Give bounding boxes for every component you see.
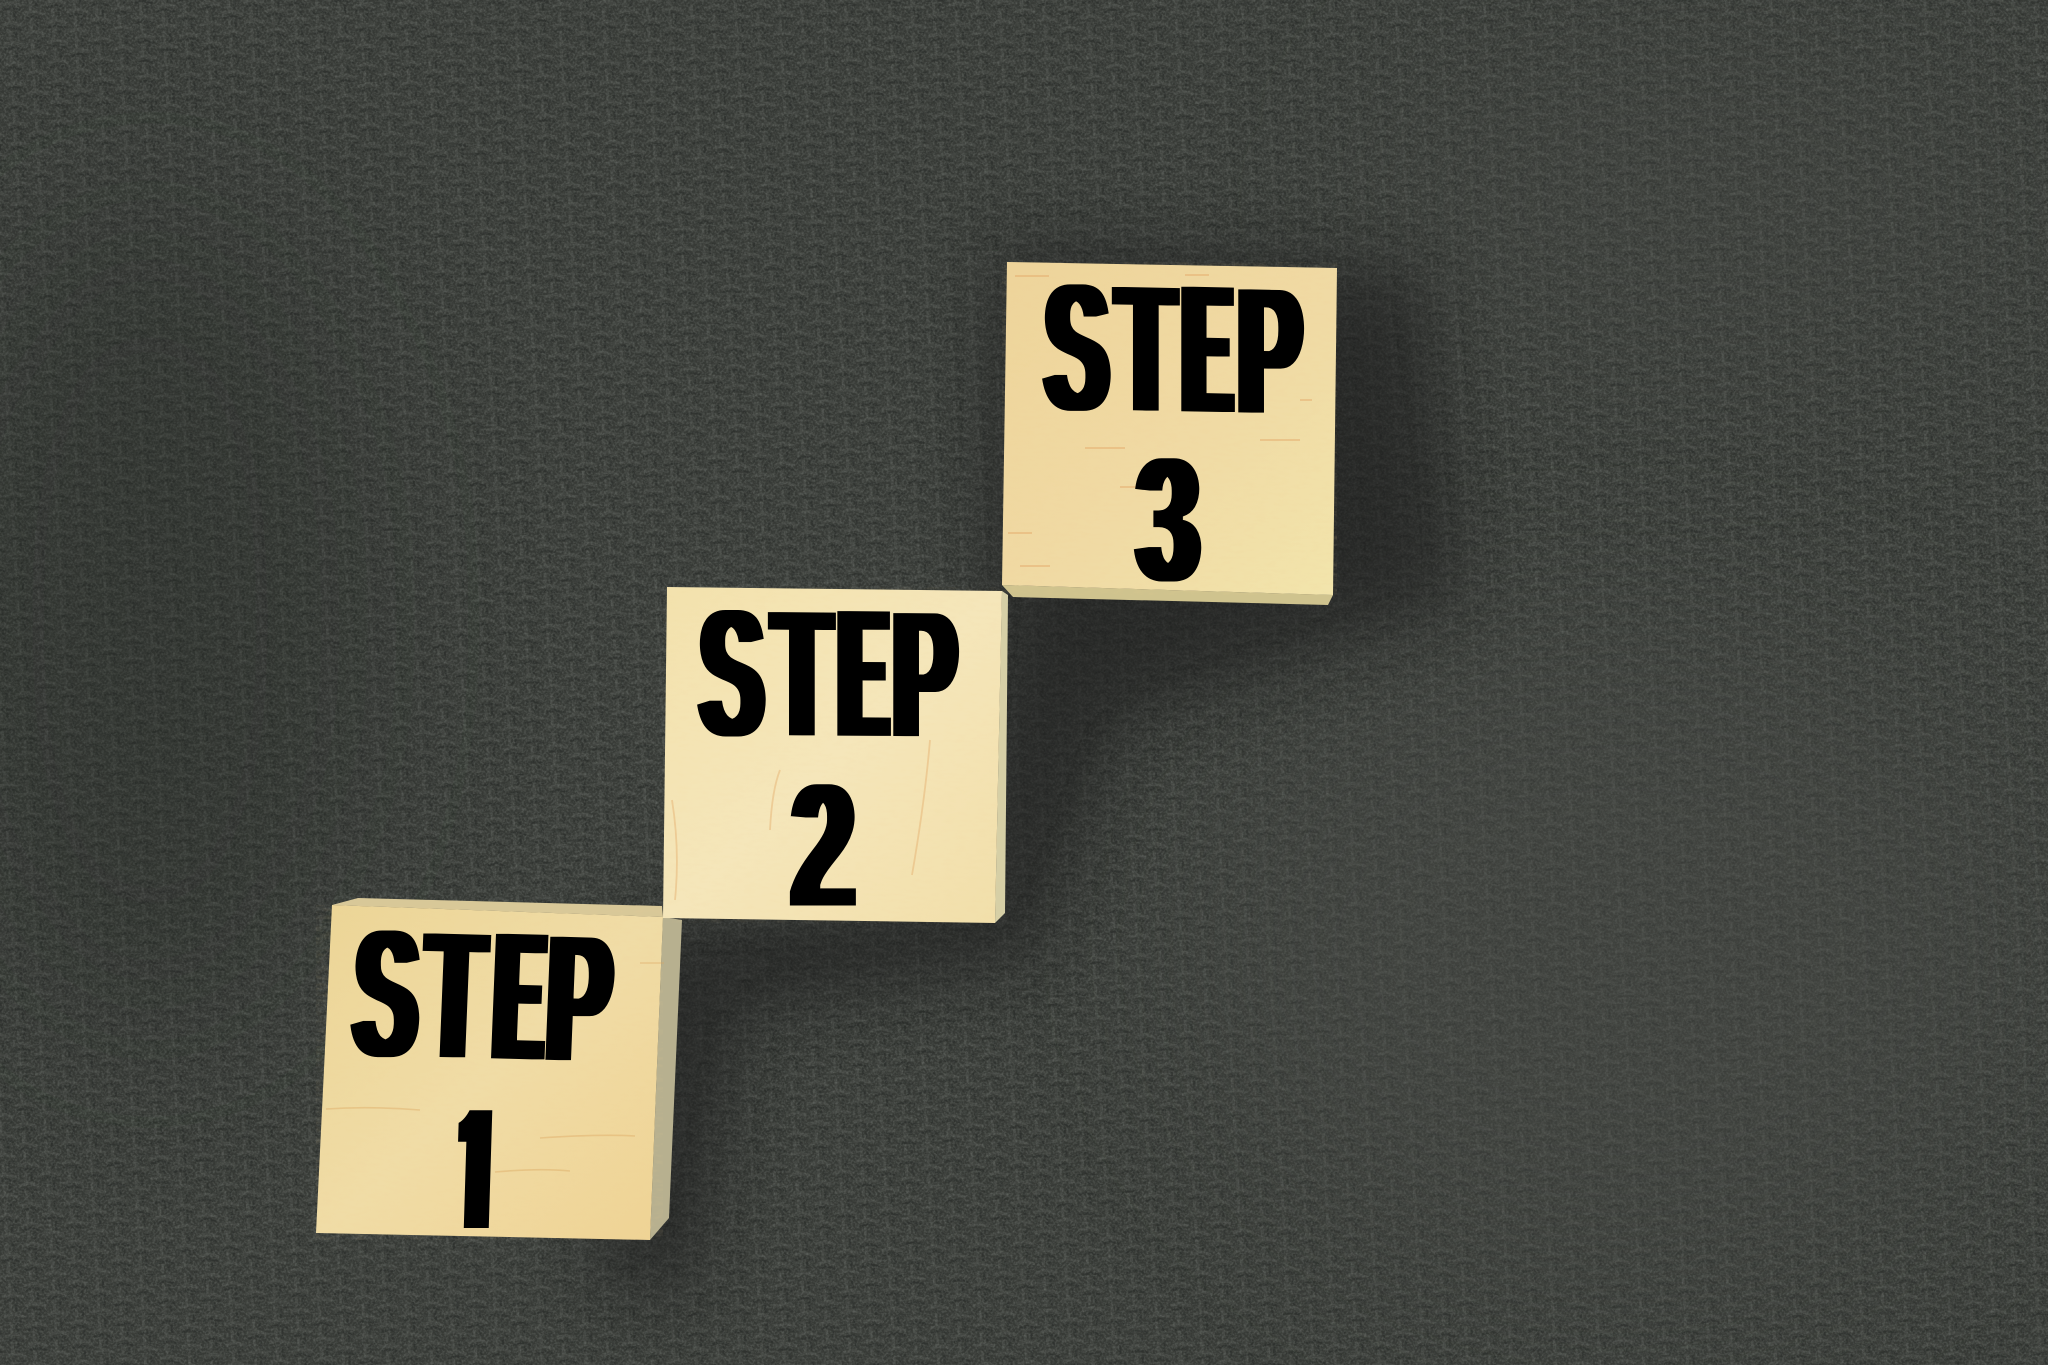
block: step 1 (316, 898, 682, 1240)
block 2 label: 2: 2 (792, 745, 854, 945)
cast shadows of the blocks (600, 250, 1460, 1290)
block 2 right side (995, 591, 1008, 923)
block 1 face (316, 905, 663, 1240)
block 1 wood grain (326, 963, 664, 1172)
block 3 face (1002, 262, 1337, 595)
block 2 face (663, 587, 1002, 923)
block: step 2 (663, 538, 1008, 945)
block 3 wood grain (1008, 275, 1312, 566)
block 1 right side (650, 917, 682, 1240)
block 1 label: STEP: STEP (350, 857, 616, 1113)
block: step 3 (1002, 212, 1337, 619)
block 1 label: 1: 1 (454, 1020, 499, 1318)
block 3 label: STEP: STEP (1045, 212, 1301, 465)
block 1 top edge (332, 898, 663, 917)
block 3 bottom side (1002, 585, 1333, 605)
block 2 label: STEP: STEP (700, 538, 956, 788)
block 3 label: 3: 3 (1137, 419, 1199, 619)
block 2 wood grain (672, 740, 930, 900)
